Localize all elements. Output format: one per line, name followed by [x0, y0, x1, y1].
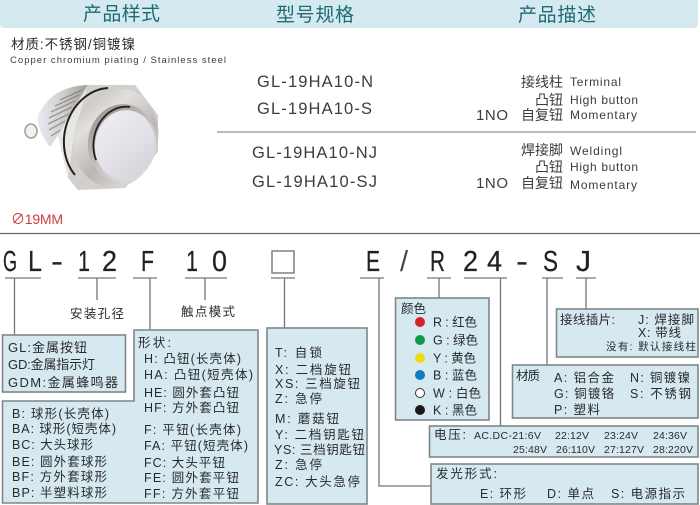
panel: button shape: BC: 大头球形 — [12, 438, 93, 452]
panel: illumination form: 发光形式: — [436, 466, 497, 481]
panel: wiring terminal: 没有: 默认接线柱 — [606, 340, 696, 353]
description: terminal type: High button — [570, 93, 638, 107]
panel: product type — [2, 335, 126, 392]
panel: voltage: 22:12V — [555, 430, 589, 442]
model code: GL-12F10□E/R24-SJ: 4 — [487, 246, 502, 278]
panel: switch function: T: 自锁 — [275, 345, 322, 360]
description: welding type: Momentary — [570, 178, 637, 192]
panel: wiring terminal: J: 焊接脚 — [638, 312, 694, 327]
model code: GL-12F10□E/R24-SJ: 0 — [212, 246, 227, 278]
panel: switch function: M: 蘑菇钮 — [275, 411, 339, 426]
panel: colour legend: R : 红色 — [433, 314, 477, 330]
model code: GL-12F10□E/R24-SJ: R — [430, 246, 445, 278]
panel: illumination form: S: 电源指示 — [611, 486, 685, 501]
description: terminal type: Momentary — [570, 108, 637, 122]
panel: button shape: HA: 凸钮(短壳体) — [144, 367, 253, 382]
description: terminal type: Terminal — [570, 75, 621, 89]
heading: product description: 产品描述 — [518, 4, 596, 26]
panel: wiring terminal — [556, 309, 698, 357]
panel: button shape: FF: 方外套平钮 — [144, 486, 239, 501]
panel: switch function: YS: 三档钥匙钮 — [274, 442, 365, 457]
model code: GL-12F10□E/R24-SJ: L — [28, 246, 42, 278]
model code: GL-12F10□E/R24-SJ: F — [141, 246, 154, 278]
model code: GL-12F10□E/R24-SJ: E — [366, 246, 380, 278]
panel: voltage: AC.DC-21:6V — [474, 430, 541, 442]
panel: button shape: BE: 圆外套球形 — [12, 454, 107, 469]
panel: button shape: BF: 方外套球形 — [12, 469, 107, 484]
description: welding type: 焊接脚 — [521, 142, 563, 158]
model code: GL-12F10□E/R24-SJ: G — [3, 246, 17, 278]
model numbers: welding type — [252, 144, 377, 191]
panel: switch function: Z: 急停 — [275, 457, 322, 472]
description: terminal type: 凸钮 — [535, 92, 563, 108]
model code: GL-12F10□E/R24-SJ: - — [51, 246, 63, 278]
panel: button shape — [2, 330, 258, 503]
panel: button shape: HE: 圆外套凸钮 — [144, 385, 239, 400]
model code: GL-12F10□E/R24-SJ: 1 — [186, 246, 198, 278]
material text block — [10, 36, 226, 66]
model code: GL-12F10□E/R24-SJ: S — [543, 246, 558, 278]
panel: illumination form: E: 环形 — [480, 487, 526, 501]
panel: colour legend: K : 黑色 — [433, 402, 477, 418]
model code: GL-12F10□E/R24-SJ: 1 — [78, 246, 90, 278]
material text block: Copper chromium piating / Stainless steel — [10, 55, 226, 66]
heading: product style: 产品样式 — [83, 3, 160, 25]
panel: colour legend: G : 绿色 — [433, 332, 478, 348]
panel: voltage: 25:48V — [513, 444, 547, 456]
panel: voltage: 24:36V — [653, 430, 687, 442]
panel: material: N: 铜镀镍 — [630, 370, 690, 385]
panel: voltage: 26:110V — [556, 444, 595, 456]
label: mounting hole diameter: 安装孔径 — [70, 306, 124, 321]
heading: model specification: 型号规格 — [276, 4, 354, 26]
panel: wiring terminal: 接线插片: — [560, 312, 615, 327]
panel: product type: GDM:金属蜂鸣器 — [8, 375, 118, 390]
description: terminal type: 自复钮 — [521, 107, 563, 123]
panel: button shape: B: 球形(长壳体) — [12, 407, 109, 421]
panel: voltage: 23:24V — [604, 430, 638, 442]
panel: colour legend: Y : 黄色 — [433, 350, 476, 366]
description: welding type: High button — [570, 160, 638, 174]
description: welding type: 凸钮 — [535, 159, 563, 175]
description: welding type: Weldingl — [570, 144, 622, 158]
panel: button shape: FA: 平钮(短壳体) — [144, 438, 248, 453]
label: contact mode: 触点模式 — [181, 305, 235, 319]
model numbers: terminal type — [257, 73, 373, 118]
panel: material: P: 塑料 — [554, 402, 600, 417]
panel: material — [512, 365, 698, 418]
panel: material: S: 不锈钢 — [630, 386, 691, 401]
description: welding type: 1NO — [476, 175, 508, 192]
panel: switch function: Y: 二档钥匙钮 — [275, 427, 364, 442]
panel: switch function — [267, 328, 367, 504]
model code: GL-12F10□E/R24-SJ: - — [516, 246, 528, 278]
description: welding type — [476, 142, 638, 192]
panel: button shape: FE: 圆外套平钮 — [144, 470, 239, 485]
panel: product type: GL:金属按钮 — [8, 340, 87, 355]
description: terminal type — [476, 74, 638, 124]
panel: button shape: HF: 方外套凸钮 — [144, 400, 239, 415]
panel: button shape: 形状: — [138, 336, 171, 350]
model code: GL-12F10□E/R24-SJ — [3, 246, 591, 278]
model code: GL-12F10□E/R24-SJ: 2 — [102, 246, 117, 278]
description: welding type: 自复钮 — [521, 175, 563, 191]
panel: colour legend: B : 蓝色 — [433, 368, 477, 382]
panel: switch function: ZC: 大头急停 — [275, 474, 360, 489]
panel: colour legend: 颜色 — [401, 301, 426, 316]
model code: GL-12F10□E/R24-SJ: 2 — [463, 246, 478, 278]
header band — [0, 0, 698, 28]
material text block: 材质:不锈钢/铜镀镍 — [11, 36, 135, 52]
panel: voltage: 27:127V — [604, 444, 644, 456]
model code: GL-12F10□E/R24-SJ: J — [576, 246, 591, 278]
model numbers: terminal type: GL-19HA10-N — [257, 73, 373, 91]
panel: switch function: X: 二档旋钮 — [275, 362, 351, 377]
diameter label: ∅19MM — [11, 211, 63, 227]
panel: material: 材质 — [516, 369, 540, 383]
panel: voltage — [430, 426, 698, 457]
panel: illumination form — [431, 464, 698, 504]
panel: button shape: F: 平钮(长壳体) — [144, 422, 241, 437]
panel: switch function: XS: 三档旋钮 — [275, 376, 360, 391]
panel: button shape: BA: 球形(短壳体) — [12, 422, 116, 436]
panel: colour legend: W : 白色 — [433, 386, 481, 400]
panel: voltage: 电压: — [434, 428, 466, 442]
product photo: metal push button — [25, 80, 167, 196]
connector lines — [5, 278, 596, 486]
panel: voltage: 28:220V — [653, 444, 693, 456]
panel: colour legend — [396, 298, 489, 420]
model numbers: welding type: GL-19HA10-SJ — [252, 173, 377, 191]
panel: button shape: BP: 半塑料球形 — [12, 485, 107, 500]
model code: GL-12F10□E/R24-SJ: / — [400, 246, 409, 278]
panel: material: G: 铜镀铬 — [554, 386, 614, 401]
model numbers: welding type: GL-19HA10-NJ — [252, 144, 377, 162]
panel: wiring terminal: X: 带线 — [638, 326, 681, 340]
panel: product type: GD:金属指示灯 — [8, 357, 95, 372]
description: terminal type: 接线柱 — [521, 74, 563, 90]
description: terminal type: 1NO — [476, 107, 508, 124]
panel: illumination form: D: 单点 — [547, 487, 594, 501]
model numbers: terminal type: GL-19HA10-S — [257, 100, 372, 118]
panel: switch function: Z: 急停 — [275, 391, 322, 406]
panel: button shape: H: 凸钮(长壳体) — [144, 351, 241, 366]
panel: material: A: 铝合金 — [554, 370, 614, 385]
panel: button shape: FC: 大头平钮 — [144, 455, 225, 470]
